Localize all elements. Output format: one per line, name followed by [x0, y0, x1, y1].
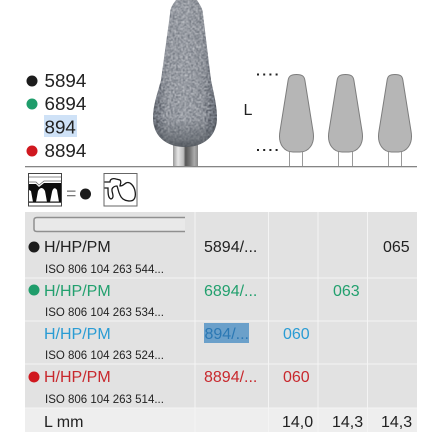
row: 894: 894/... — [204, 326, 249, 343]
row: 894 — [44, 323, 310, 362]
legend item: 894: 894 — [44, 116, 76, 138]
row: 8894: 8894/... — [204, 369, 257, 386]
row: 5894: ISO 806 104 263 544... — [45, 264, 164, 276]
silhouette: bur 1 — [280, 74, 313, 166]
legend item: 8894: 8894 — [44, 140, 86, 161]
dimension marks: L: L — [244, 102, 252, 119]
dimension marks: L — [244, 74, 280, 150]
row: 8894: 060 — [283, 369, 310, 386]
row: length in mm: 14,3 — [381, 414, 412, 431]
legend item: 6894: 6894 — [44, 93, 86, 114]
row: 5894: H/HP/PM — [44, 239, 111, 256]
row: 8894: ISO 806 104 263 514... — [45, 394, 164, 406]
row: length in mm: L mm — [44, 414, 83, 431]
icon: crown and bridge — [104, 174, 137, 206]
baseline rule — [25, 166, 417, 167]
row: 6894: ISO 806 104 263 534... — [45, 307, 164, 319]
row: length in mm: 14,3 — [332, 414, 363, 431]
legend item: 5894: 5894 — [44, 70, 86, 91]
row: 5894: 5894/... — [204, 239, 257, 256]
size diagram: three bur silhouettes — [280, 74, 411, 166]
row: 8894: H/HP/PM — [44, 369, 111, 386]
table — [25, 212, 417, 432]
table: footer row background — [25, 408, 417, 432]
row: 894: 060 — [283, 326, 310, 343]
icon: gum and teeth — [28, 174, 62, 206]
table header: shank bar icon — [34, 218, 185, 232]
icon: black dot — [80, 188, 91, 200]
equals sign — [67, 190, 76, 196]
row: 6894: 6894/... — [204, 283, 257, 300]
row: 894: ISO 806 104 263 524... — [45, 350, 164, 362]
photo: diamond bur — [150, 0, 220, 166]
silhouette: bur 3 — [379, 74, 411, 166]
row: 5894: 065 — [383, 239, 410, 256]
row: 6894 — [28, 283, 360, 319]
row: 8894 — [28, 369, 310, 406]
silhouette: bur 2 — [329, 74, 362, 166]
row: length in mm — [44, 414, 412, 431]
row: 894: H/HP/PM — [44, 326, 111, 343]
row: 5894 — [28, 239, 410, 276]
row: 6894: H/HP/PM — [44, 283, 111, 300]
row: 6894: 063 — [333, 283, 360, 300]
legend: product numbers — [26, 70, 86, 161]
row: length in mm: 14,0 — [282, 414, 313, 431]
